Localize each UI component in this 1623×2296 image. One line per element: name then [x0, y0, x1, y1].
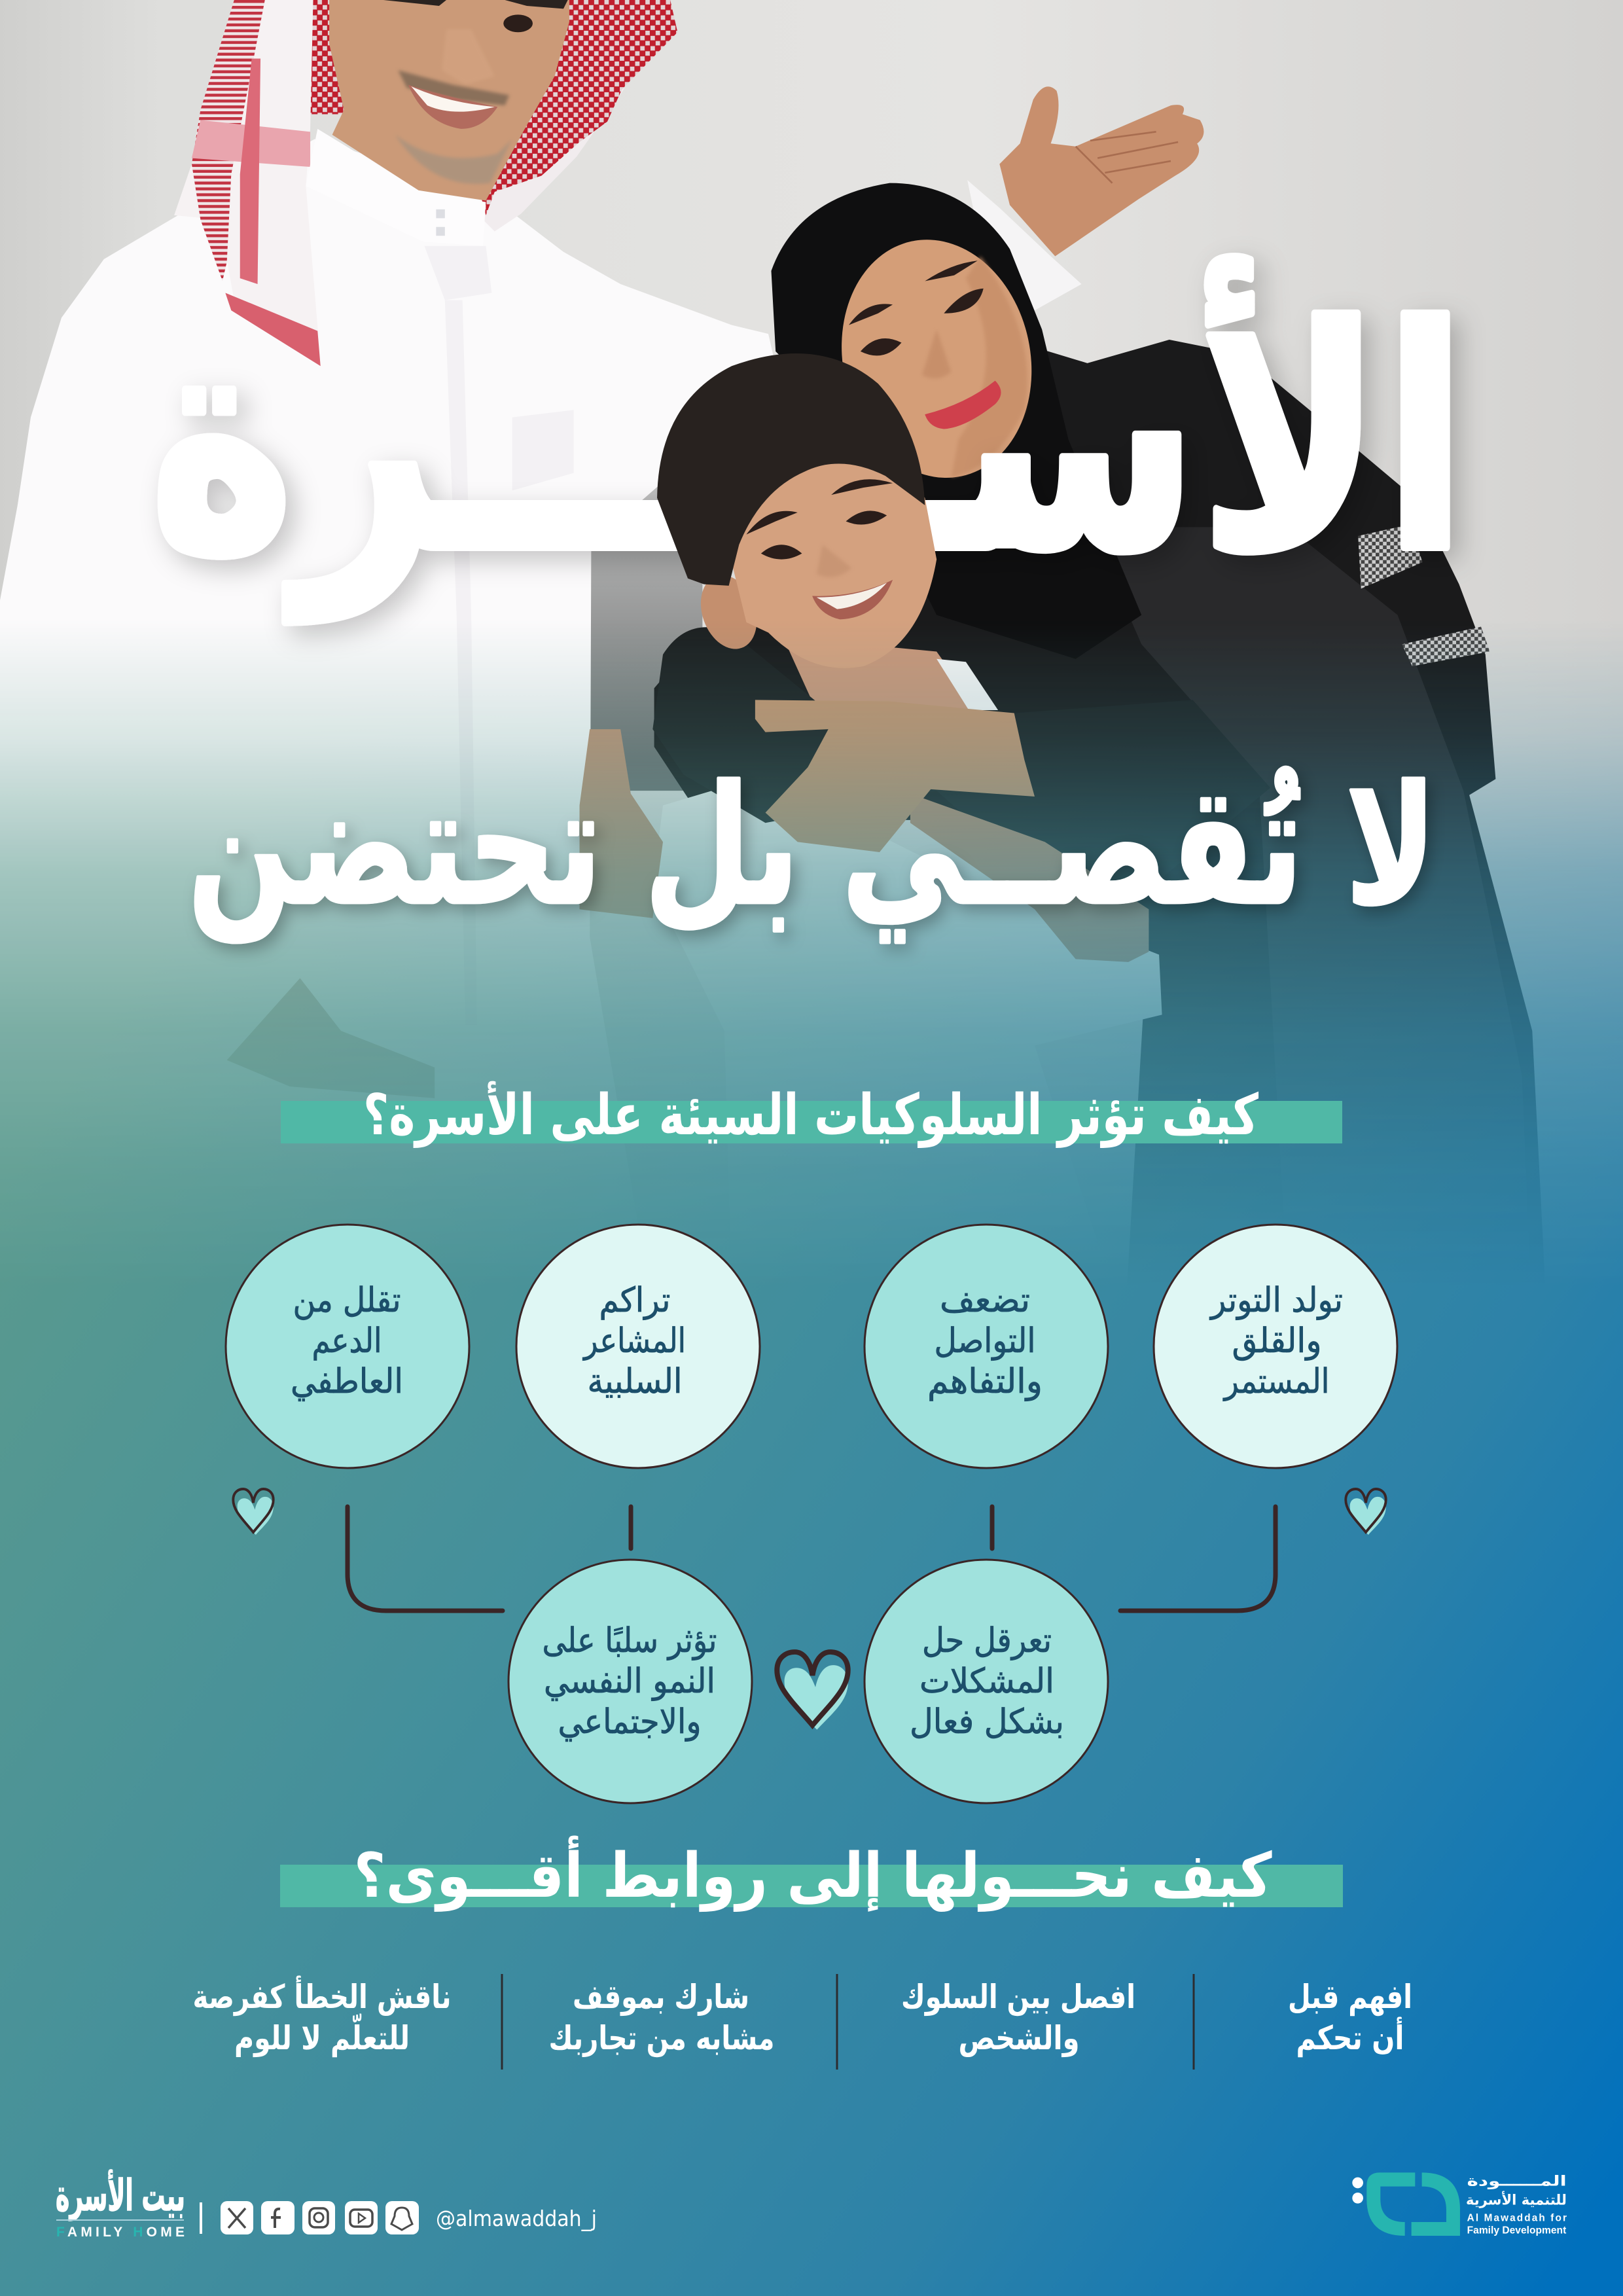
face nose shadow — [442, 29, 495, 85]
logo: Al Mawaddah: Family Development — [1467, 2225, 1566, 2236]
icon: heart right — [1346, 1489, 1386, 1535]
icon: heart left — [233, 1489, 274, 1535]
boy nose — [817, 545, 851, 577]
boy thumb and fist — [580, 729, 663, 918]
mother face — [820, 222, 1053, 495]
boy collar — [936, 659, 998, 710]
logo: Al Mawaddah: المــــــودة — [1467, 2173, 1567, 2189]
footer divider — [200, 2202, 202, 2234]
circle 1 — [1154, 1225, 1397, 1468]
boy ear — [691, 567, 766, 657]
tip 3: شارك بموقف — [573, 1978, 749, 2017]
icon: snapchat — [385, 2201, 419, 2234]
ghutra right outer white band — [483, 88, 625, 231]
circle 4: الدعم — [312, 1321, 382, 1361]
tip 2 — [901, 1978, 1135, 2058]
circle 2: تضعف — [940, 1281, 1030, 1320]
boy teeth — [817, 583, 887, 609]
teal to blue gradient overlay — [0, 648, 1623, 2296]
connector lines — [348, 1507, 1275, 1611]
circle 2 — [865, 1225, 1108, 1468]
tip 4: ناقش الخطأ كفرصة — [192, 1975, 452, 2017]
icon: youtube — [345, 2201, 378, 2234]
hand creases — [1076, 132, 1178, 183]
circle 5 — [865, 1560, 1108, 1803]
boy forearm — [910, 794, 1149, 962]
circle 2: التواصل — [935, 1321, 1035, 1361]
mother hand on boy — [755, 700, 1035, 852]
circle 6 — [508, 1560, 752, 1803]
circle 1: المستمر — [1222, 1362, 1330, 1401]
logo: family home: بيت الأسرة — [56, 2169, 185, 2221]
father eye — [503, 14, 533, 32]
boy neck — [783, 637, 984, 717]
ghutra left patterned strip — [192, 0, 265, 281]
tip 2: افصل بين السلوك — [901, 1978, 1135, 2017]
father collar — [306, 129, 486, 246]
ghutra pink stripes — [192, 120, 310, 167]
circle 4 — [226, 1225, 469, 1468]
circle 4: العاطفي — [291, 1362, 403, 1401]
social handle: @almawaddah_j — [436, 2206, 597, 2231]
tip 3 — [548, 1978, 775, 2058]
title: الأسرة — [149, 254, 1467, 624]
tip 3: مشابه من تجاربك — [548, 2019, 775, 2058]
boy smile — [812, 580, 893, 619]
title kashida bar — [395, 500, 1024, 548]
gown lighter folds — [1090, 527, 1531, 1289]
icon: instagram — [302, 2201, 335, 2234]
circle 4: تقلل من — [293, 1281, 401, 1320]
icon: facebook — [261, 2201, 294, 2234]
heading bar 2 — [280, 1836, 1343, 1912]
white sleeve — [967, 180, 1082, 310]
logo: Al Mawaddah: للتنمية الأسرية — [1466, 2190, 1567, 2208]
father beard — [395, 135, 512, 184]
father lower hand — [227, 978, 435, 1098]
boy hair — [657, 353, 925, 586]
circle 1: تولد التوتر — [1209, 1281, 1343, 1320]
heading bar 1 — [281, 1081, 1342, 1148]
mother hijab — [771, 183, 1141, 659]
dividers — [502, 1974, 1194, 2070]
boy eyes and brows — [746, 479, 893, 560]
mother face shade — [952, 257, 1027, 477]
tip 2: والشخص — [958, 2019, 1080, 2058]
circle 3: المشاعر — [582, 1321, 686, 1361]
circle 5: تعرقل حل — [922, 1621, 1052, 1660]
mother eyes and brows — [849, 260, 984, 355]
heading 2 text: كيف نحـــولها إلى روابط أقـــوى؟ — [353, 1836, 1272, 1912]
logo: Al Mawaddah: Al Mawaddah for — [1467, 2212, 1567, 2223]
circle 5: المشكلات — [919, 1662, 1054, 1701]
circle 3: السلبية — [588, 1362, 682, 1401]
circle 3: تراكم — [599, 1281, 670, 1320]
circle 1: والقلق — [1232, 1321, 1322, 1361]
circle 5: بشكل فعال — [910, 1702, 1064, 1742]
logo: Al Mawaddah — [1352, 2172, 1567, 2236]
robe folds — [424, 246, 574, 1025]
circle 2: والتفاهم — [927, 1362, 1043, 1401]
collar buttons — [436, 209, 445, 236]
father teeth — [411, 86, 495, 112]
mother scarf trim — [1358, 524, 1489, 666]
circle 6: تؤثر سلبًا على — [542, 1621, 717, 1660]
logo: family home — [56, 2169, 185, 2240]
logo: family home: FAMILY HOME — [56, 2225, 185, 2240]
tip 1 — [1288, 1978, 1412, 2057]
ghutra left white band — [174, 0, 321, 366]
father moustache — [398, 70, 509, 105]
wall shadow between father and boy — [578, 439, 702, 791]
father robe — [0, 139, 776, 1464]
mother nose — [922, 329, 952, 378]
tip 1: أن تحكم — [1296, 2017, 1404, 2057]
icon: X — [221, 2201, 253, 2234]
father mouth — [408, 85, 497, 129]
tip 4: للتعلّم لا للوم — [234, 2013, 410, 2058]
tip 4 — [192, 1975, 452, 2058]
father neck and face — [329, 0, 569, 200]
mother raised hand — [999, 86, 1204, 257]
boy shirt — [652, 776, 1162, 1289]
boy face — [727, 457, 936, 668]
mother lips — [925, 381, 1001, 429]
icon: heart centre — [777, 1652, 848, 1730]
father ghutra right red — [476, 0, 677, 215]
mother arm hugging boy — [652, 627, 1270, 889]
father brow — [383, 0, 568, 9]
circle 6: النمو النفسي — [544, 1662, 715, 1701]
circle 3 — [516, 1225, 760, 1468]
ghutra inner red behind face — [310, 0, 351, 115]
tip 1: افهم قبل — [1288, 1978, 1412, 2017]
heading 1 text: كيف تؤثر السلوكيات السيئة على الأسرة؟ — [363, 1081, 1259, 1148]
photo: father and mother — [0, 0, 1545, 1464]
mother gown — [654, 340, 1545, 1289]
photo: son in front of the title — [227, 353, 1270, 1289]
circle 6: والاجتماعي — [558, 1702, 702, 1742]
